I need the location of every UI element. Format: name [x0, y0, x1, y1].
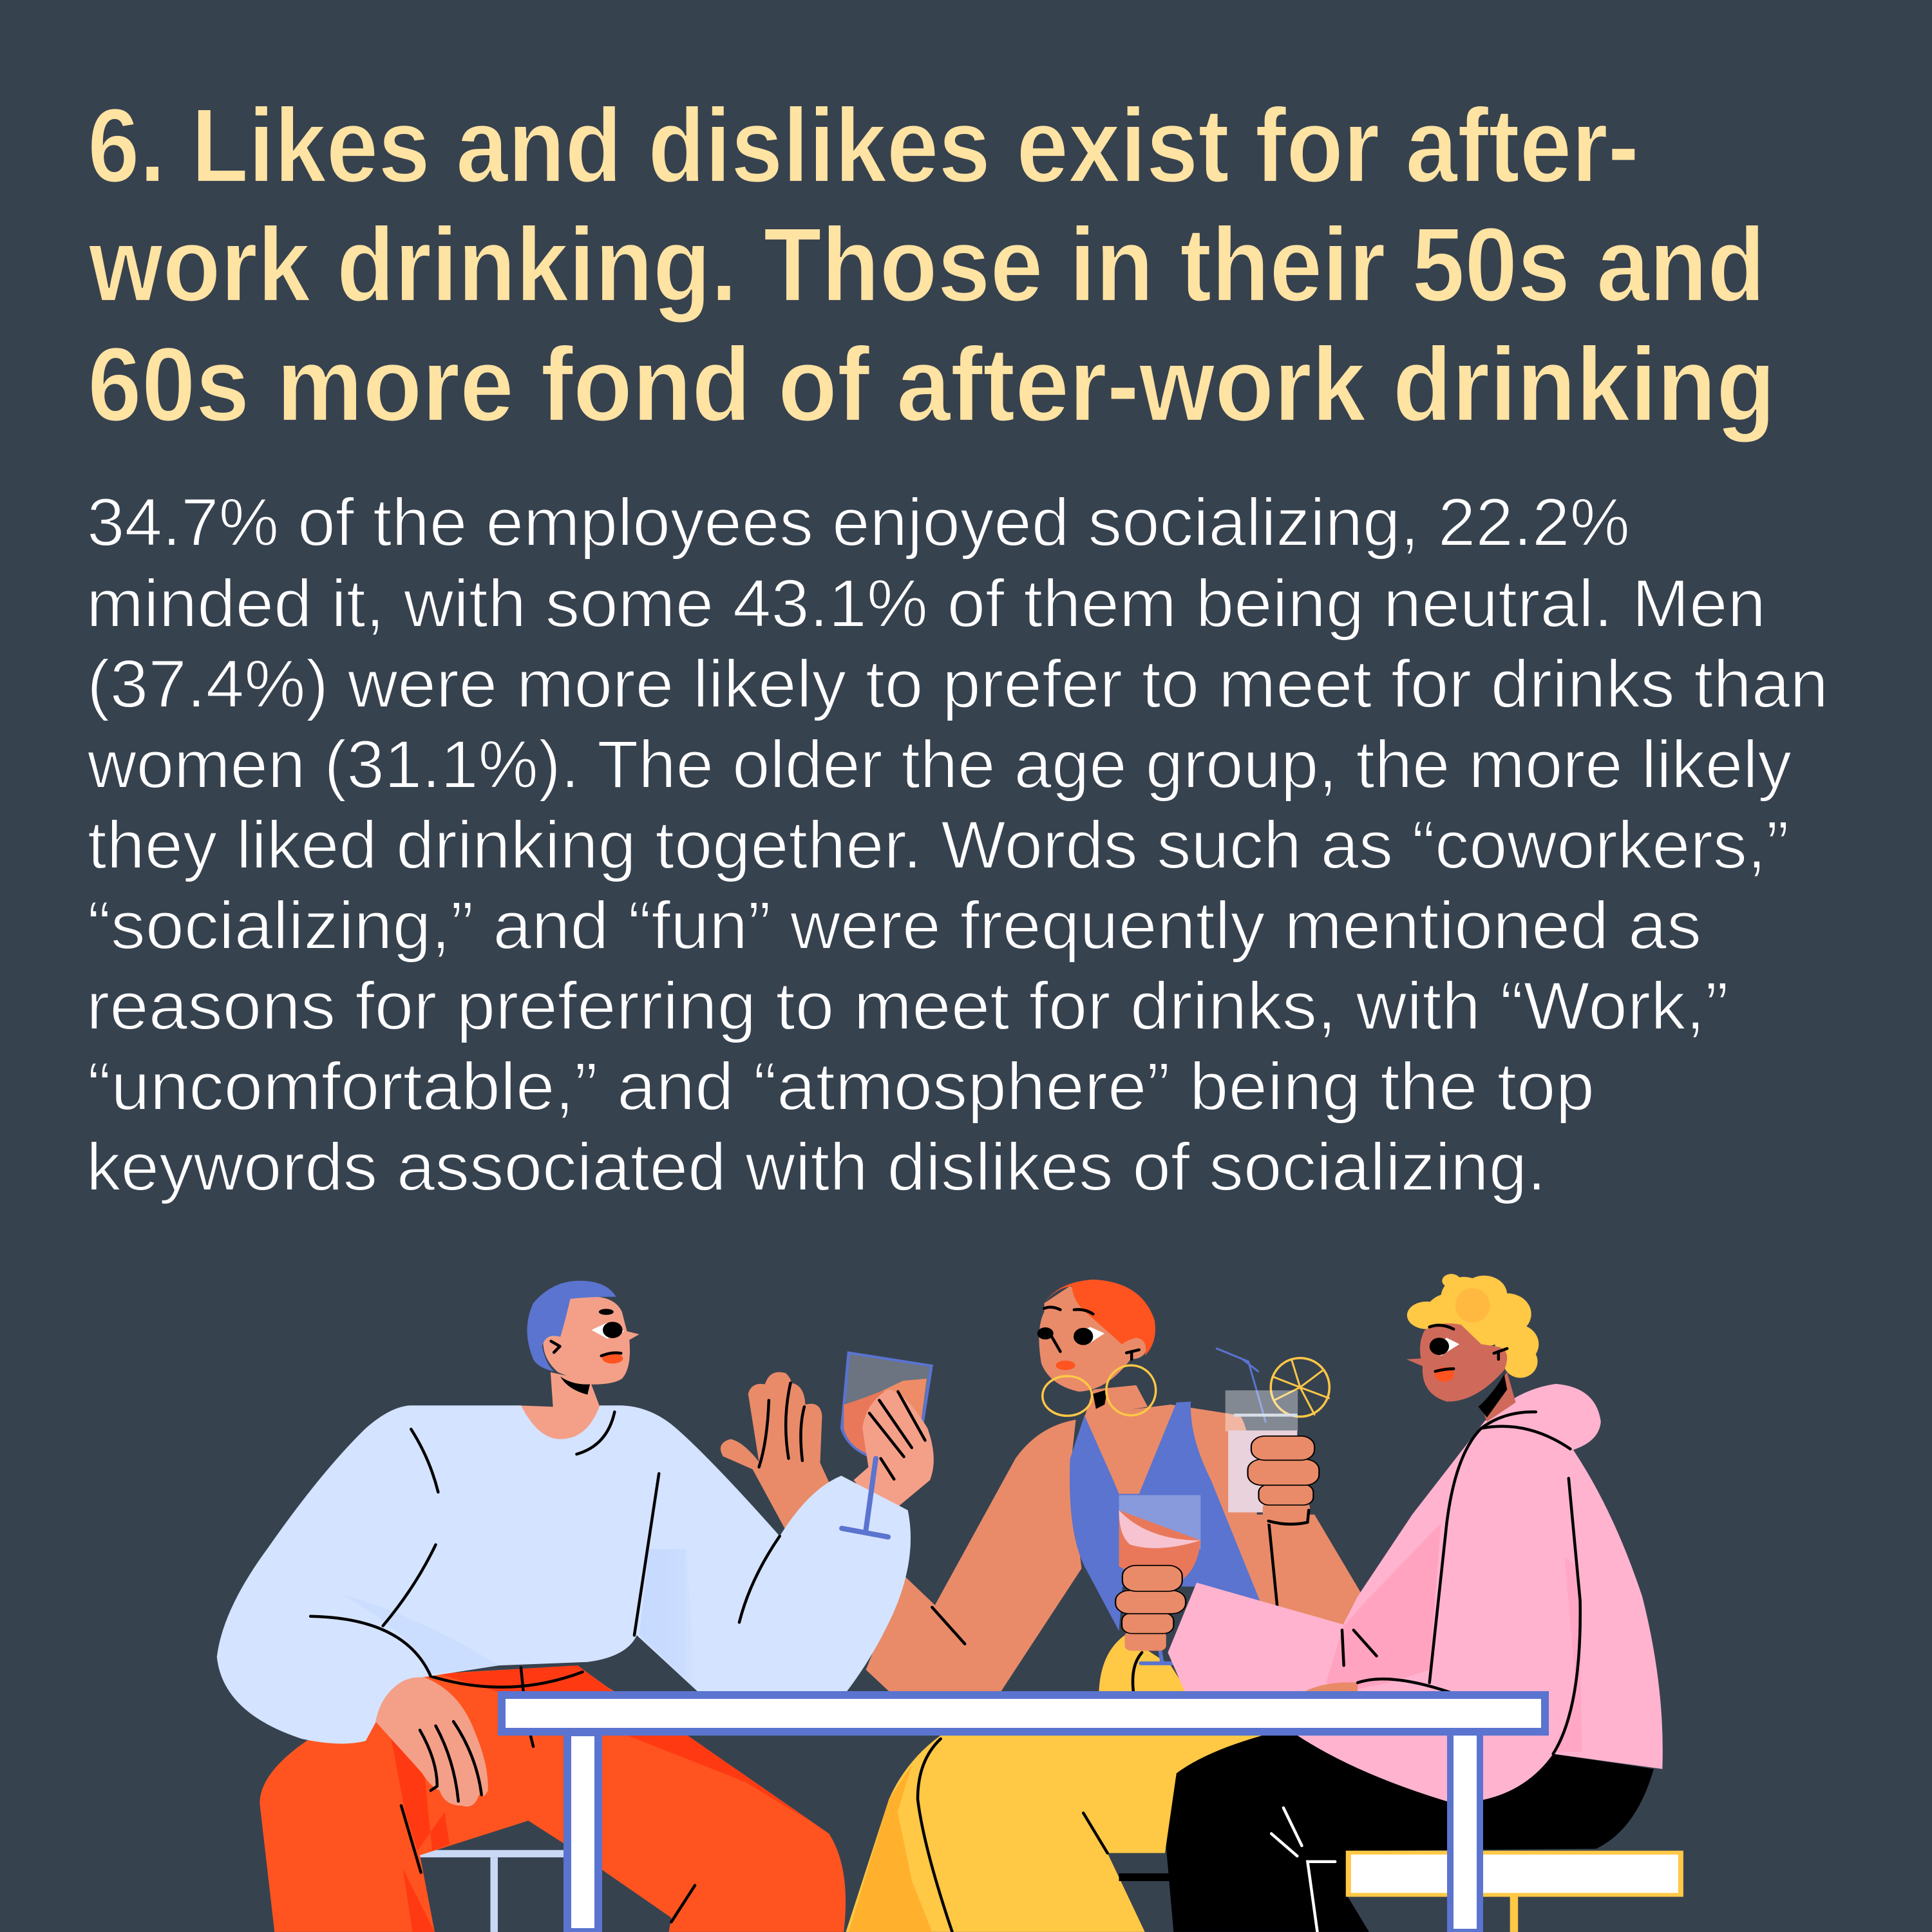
body text: minded it, with some 43.1% of them being neutral. Men	[86, 566, 1766, 641]
body text: women (31.1%). The older the age group, the more likely	[87, 727, 1792, 802]
right man's head	[1406, 1274, 1539, 1422]
body text	[86, 485, 1828, 1205]
cocktail with lemon and straw	[1217, 1349, 1329, 1512]
body text: “socializing,” and “fun” were frequently mentioned as	[88, 888, 1701, 963]
figure: left man	[217, 1281, 934, 1932]
sweater	[217, 1405, 911, 1744]
neck and chest	[518, 1372, 601, 1441]
pink hoodie	[1133, 1384, 1663, 1801]
orange trousers	[260, 1665, 846, 1932]
woman's yellow trousers	[846, 1736, 1263, 1932]
table	[502, 1695, 1545, 1932]
hand holding glass	[854, 1390, 934, 1507]
woman's arm and torso	[866, 1385, 1361, 1691]
title: 6. Likes and dislikes exist for after-	[88, 86, 1639, 204]
body text: “uncomfortable,” and “atmosphere” being the top	[88, 1049, 1595, 1124]
yellow stool	[1349, 1853, 1681, 1932]
title: work drinking. Those in their 50s and	[88, 205, 1765, 323]
fist holding wine glass	[1115, 1566, 1186, 1651]
body text: reasons for preferring to meet for drinks, with “Work,”	[86, 969, 1728, 1044]
earrings	[1043, 1365, 1156, 1416]
wine glass	[842, 1353, 931, 1459]
table top	[502, 1695, 1545, 1732]
illustration: three coworkers drinking at a table	[217, 1274, 1681, 1932]
man's black trousers	[1164, 1736, 1654, 1932]
body text: keywords associated with dislikes of socializing.	[86, 1130, 1546, 1205]
wine glass held by woman	[1119, 1495, 1200, 1663]
title: 60s more fond of after-work drinking	[88, 325, 1776, 443]
figure: woman and right-hand man	[846, 1274, 1681, 1932]
glass stem and foot over cuff	[842, 1459, 888, 1537]
stool	[417, 1850, 565, 1932]
table leg left	[567, 1732, 598, 1932]
white knee lines	[1271, 1808, 1335, 1932]
table leg right	[1450, 1732, 1480, 1932]
woman's yellow top at waist	[1099, 1635, 1188, 1692]
body text: they liked drinking together. Words such as “coworkers,”	[88, 808, 1789, 883]
title	[88, 86, 1776, 443]
hand on thigh	[375, 1678, 488, 1806]
raised hand	[721, 1372, 829, 1528]
body text: 34.7% of the employees enjoyed socializing, 22.2%	[87, 485, 1630, 560]
left man's head	[527, 1281, 639, 1395]
body text: (37.4%) were more likely to prefer to meet for drinks than	[87, 647, 1828, 722]
fist holding cocktail	[1248, 1436, 1319, 1524]
woman's head	[1037, 1280, 1155, 1392]
